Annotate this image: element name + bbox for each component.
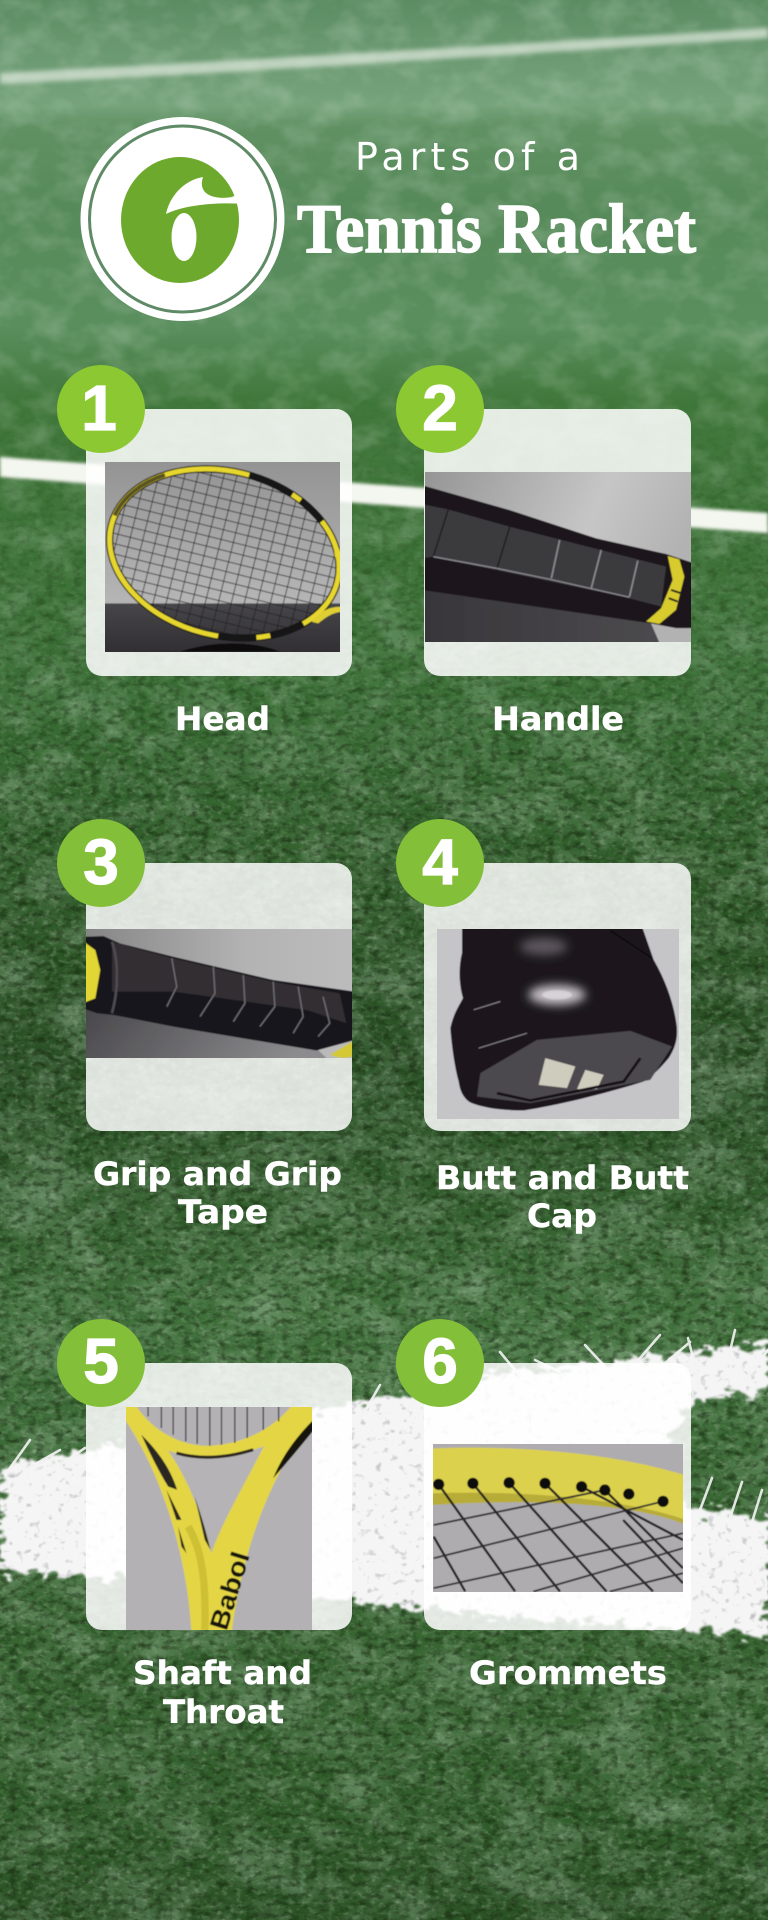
- card: [424, 409, 691, 676]
- panel: head: [57, 365, 357, 738]
- label: Grip and Grip Tape: Grip and Grip: [93, 1155, 342, 1193]
- photo: grip tape: [86, 929, 352, 1058]
- number badge 3: 3: [83, 826, 119, 898]
- label: Shaft and Throat: Throat: [163, 1693, 284, 1731]
- card: [86, 1363, 352, 1630]
- card: [424, 863, 691, 1131]
- number badge 2: 2: [422, 372, 458, 444]
- panel: shaft and throat: [57, 1319, 352, 1731]
- number badge 2: [396, 365, 484, 453]
- number badge 4: 4: [422, 826, 458, 898]
- photo: butt cap: [437, 929, 679, 1119]
- big 6 notch: [166, 177, 245, 214]
- big 6 counter: [172, 213, 196, 261]
- big 6 body: [121, 157, 239, 283]
- label: Shaft and Throat: Shaft and: [133, 1654, 312, 1692]
- panel: handle: [396, 365, 694, 738]
- number badge 1: 1: [81, 372, 117, 444]
- photo: racket head: [105, 462, 340, 652]
- title line: Parts of a: Parts of a: [355, 135, 580, 179]
- panel: grommets: [396, 1319, 691, 1692]
- number badge 4: [396, 819, 484, 907]
- photo: shaft and throat: Babol: [204, 1548, 256, 1633]
- title line: Tennis Racket: Tennis Racket: [297, 191, 696, 268]
- number badge 6: 6: [422, 1325, 458, 1397]
- label: Shaft and Throat: [133, 1654, 312, 1731]
- number badge 1: [57, 365, 145, 453]
- white line tufts: [5, 1330, 768, 1522]
- number badge 5: [57, 1319, 145, 1407]
- photo: shaft and throat: [126, 1407, 312, 1633]
- panel: grip and grip tape: [57, 819, 355, 1231]
- card: [86, 409, 352, 676]
- photo: grommets: [433, 1444, 683, 1592]
- photo: racket handle: [425, 472, 691, 642]
- label: Grip and Grip Tape: [93, 1155, 342, 1231]
- label: Handle: Handle: [492, 700, 624, 738]
- card: [424, 1363, 691, 1630]
- number badge 6: [396, 1319, 484, 1407]
- label: Grommets: Grommets: [469, 1654, 667, 1692]
- title: [297, 135, 696, 268]
- label: Butt and Butt Cap: Butt and Butt: [436, 1159, 689, 1197]
- label: Butt and Butt Cap: [436, 1159, 689, 1235]
- label: Head: Head: [175, 700, 270, 738]
- header badge: 6: 6: [130, 133, 230, 301]
- label: Grip and Grip Tape: Tape: [178, 1193, 268, 1231]
- number badge 3: [57, 819, 145, 907]
- header badge: 6: [80, 117, 284, 321]
- label: Butt and Butt Cap: Cap: [527, 1197, 597, 1235]
- card: [86, 863, 352, 1131]
- number badge 5: 5: [83, 1325, 119, 1397]
- panel: butt and butt cap: [396, 819, 691, 1235]
